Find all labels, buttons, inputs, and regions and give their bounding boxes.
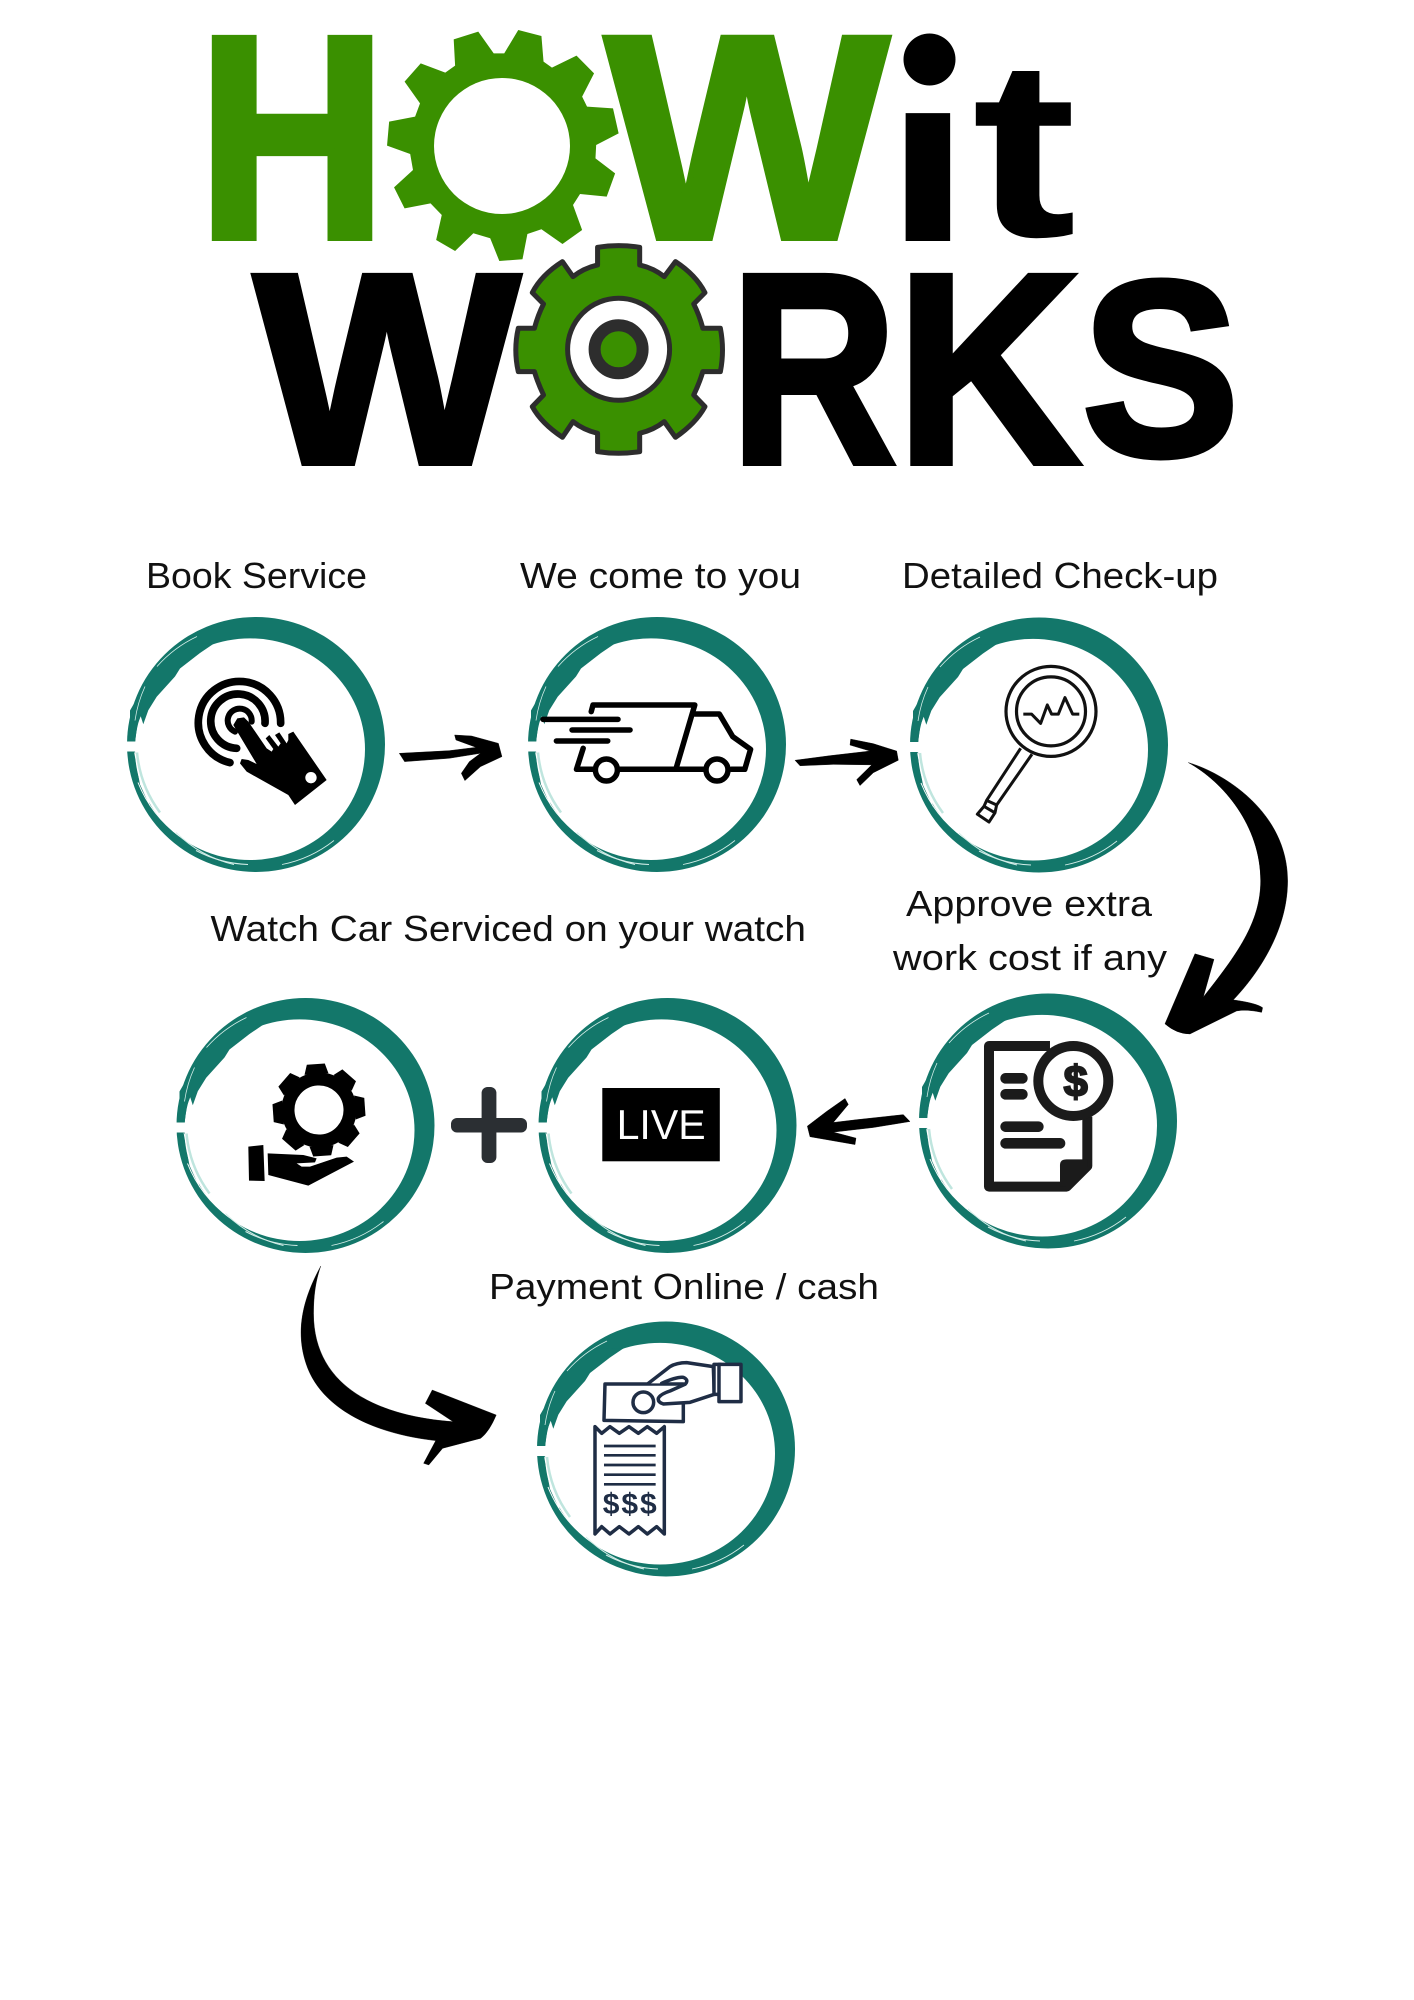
step 2: ring and truck icon: [525, 617, 786, 872]
step label: Payment Online / cash: Payment Online / cash: [489, 1266, 879, 1307]
step label: We come to you: We come to you: [520, 555, 801, 596]
arrow: curved step 5 to payment: [301, 1266, 496, 1465]
receipt amount: $$$: [603, 1488, 657, 1521]
gear with target used as letter O: [516, 246, 722, 453]
icon: delivery truck: [543, 705, 751, 781]
icon: invoice with dollar coin: $: [1064, 1059, 1088, 1107]
step label: Approve extra work cost if any: Approve extra: [906, 883, 1153, 924]
title: HOW it WORKS: [212, 30, 1233, 466]
step label: Approve extra work cost if any: work cost if any: [892, 937, 1167, 978]
title word it: t: [972, 8, 1076, 290]
icon: LIVE badge: LIVE: [617, 1101, 706, 1148]
arrow: curved step 3 to step 4: [1165, 763, 1288, 1034]
step label: Approve extra work cost if any: [892, 883, 1167, 978]
title letter W line two: W: [254, 216, 522, 521]
gear used as letter O: [387, 30, 619, 261]
step 4: ring and invoice icon: [916, 994, 1177, 1248]
title letter R: R: [730, 217, 897, 521]
icon: LIVE badge: [602, 1088, 720, 1161]
icon: plus sign: [451, 1087, 527, 1163]
icon: magnifier with waveform: [977, 666, 1096, 822]
icon: hand paying bill with receipt: [595, 1363, 741, 1534]
step 3: ring and magnifier icon: [907, 618, 1168, 872]
icon: hand tapping: [198, 681, 327, 805]
icon: invoice with dollar coin: [989, 1046, 1108, 1187]
title word it: i: [883, 22, 973, 293]
title letter K: K: [896, 217, 1081, 521]
arrow: step 1 to step 2: [399, 735, 502, 781]
icon: gear over open hand: [248, 1061, 368, 1186]
arrow: step 4 to live: [807, 1098, 910, 1145]
step label: Book Service: Book Service: [146, 555, 367, 596]
step 5b: ring and live icon: [536, 998, 796, 1253]
title letter S: S: [1082, 230, 1239, 509]
step label: Watch Car Serviced on your watch: Watch Car Serviced on your watch: [210, 908, 806, 949]
title word it: [904, 34, 1073, 241]
step 1: ring and touch icon: [124, 617, 385, 872]
step 5a: ring and gear in hand icon: [174, 998, 434, 1253]
step 6: ring and payment icon: [534, 1322, 795, 1576]
arrow: step 2 to step 3: [795, 739, 898, 786]
step label: Detailed Check-up: Detailed Check-up: [902, 555, 1218, 596]
